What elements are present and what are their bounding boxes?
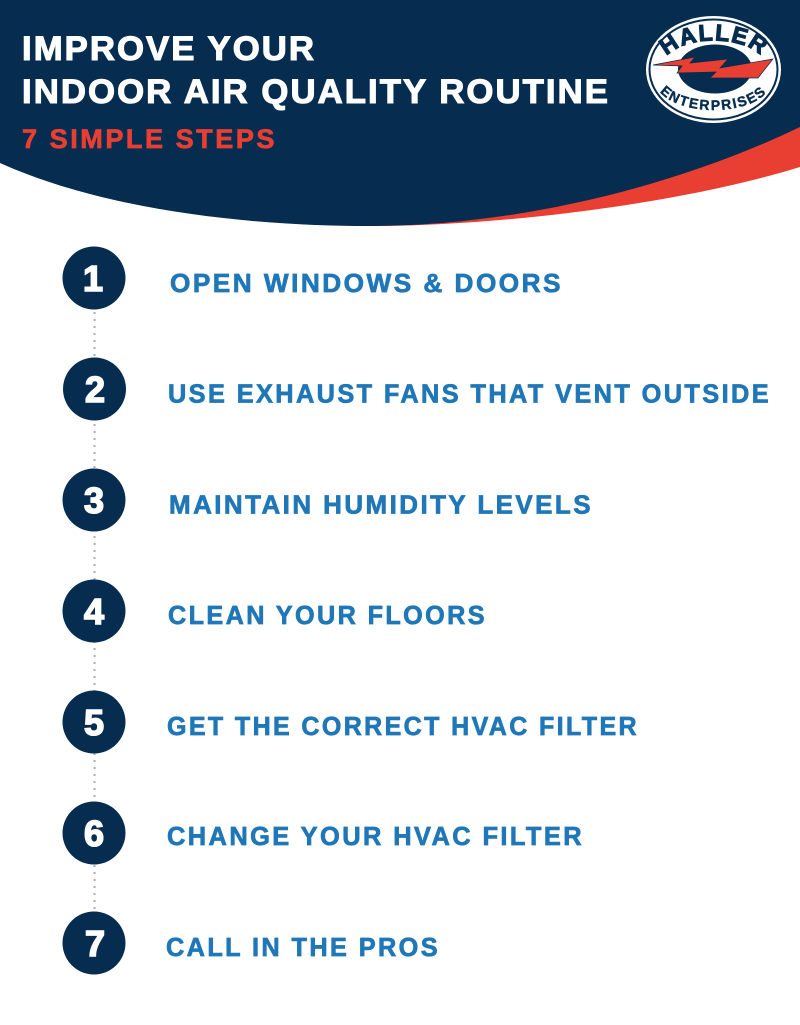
step 5: 5 bbox=[84, 702, 104, 743]
logo: Haller Enterprises: ENTERPRISES bbox=[660, 85, 765, 110]
step 1: OPEN WINDOWS & DOORS bbox=[170, 270, 563, 298]
step 7: 7 bbox=[85, 923, 105, 964]
step 1: 1 bbox=[83, 258, 103, 299]
title: IMPROVE YOUR bbox=[22, 30, 316, 68]
subtitle: 7 SIMPLE STEPS bbox=[22, 124, 277, 154]
step 3: MAINTAIN HUMIDITY LEVELS bbox=[169, 492, 593, 520]
title bbox=[22, 30, 610, 111]
logo: Haller Enterprises bbox=[646, 16, 781, 123]
step 4: 4 bbox=[84, 591, 104, 632]
step 4: CLEAN YOUR FLOORS bbox=[168, 602, 487, 630]
logo: Haller Enterprises: HALLER bbox=[658, 24, 767, 56]
title: INDOOR AIR QUALITY ROUTINE bbox=[22, 73, 610, 111]
step 6: CHANGE YOUR HVAC FILTER bbox=[167, 823, 584, 851]
step 6: 6 bbox=[84, 813, 104, 854]
step 1 bbox=[62, 246, 563, 310]
step 6 bbox=[62, 802, 584, 864]
step 5: GET THE CORRECT HVAC FILTER bbox=[167, 713, 639, 741]
step 7 bbox=[62, 912, 440, 974]
step 3: 3 bbox=[84, 480, 104, 521]
step 4 bbox=[62, 580, 487, 642]
dotted connector bbox=[94, 312, 96, 915]
step 3 bbox=[62, 468, 593, 532]
header band bbox=[0, 0, 800, 226]
step 2: 2 bbox=[85, 369, 105, 410]
step 2: USE EXHAUST FANS THAT VENT OUTSIDE bbox=[168, 380, 771, 408]
step 7: CALL IN THE PROS bbox=[166, 934, 440, 962]
step 2 bbox=[63, 358, 771, 420]
step 5 bbox=[62, 690, 639, 754]
